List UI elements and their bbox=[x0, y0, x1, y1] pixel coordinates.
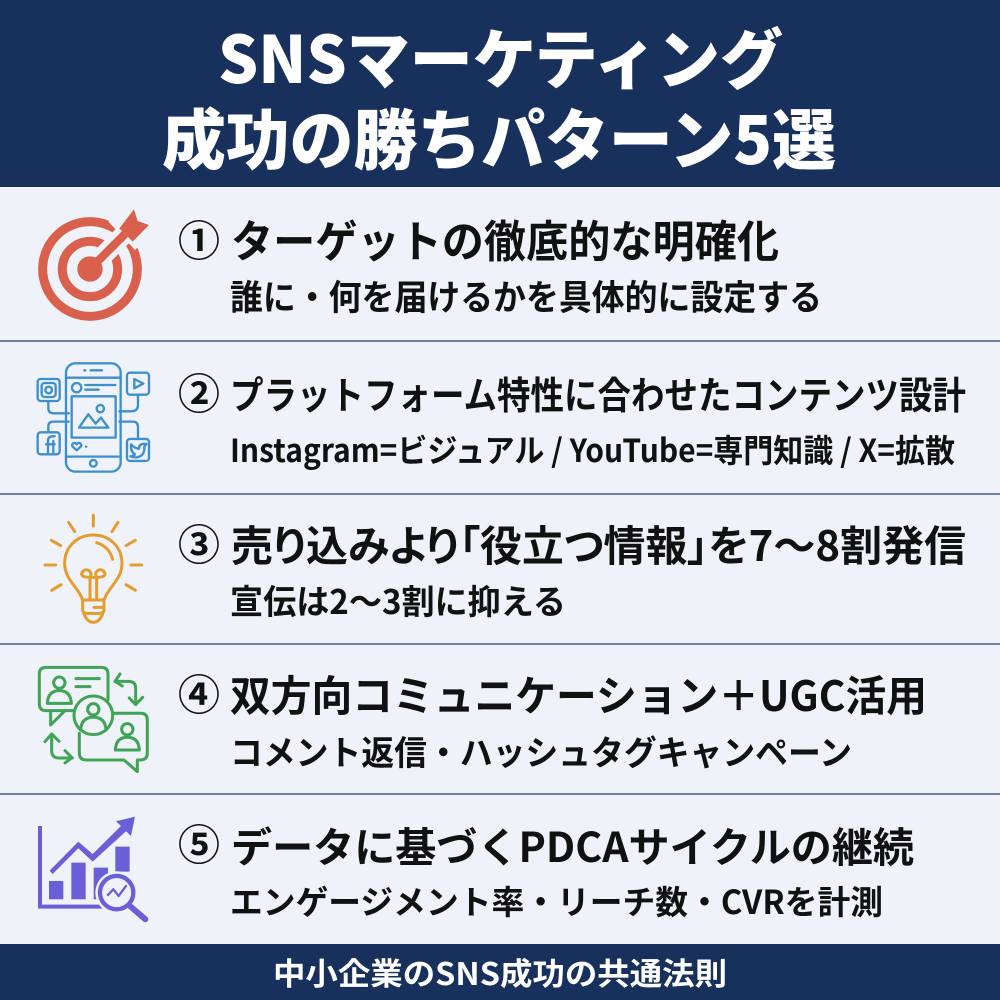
icon: light bulb bbox=[45, 515, 142, 622]
heading 4: 双方向コミュニケーション＋UGC活用 bbox=[230, 663, 927, 724]
panel: pattern 1 bbox=[43, 206, 822, 321]
description 5: エンゲージメント率・リーチ数・CVRを計測 bbox=[230, 876, 883, 924]
panel: pattern 3 bbox=[45, 512, 966, 624]
icon: conversation with arrows bbox=[39, 667, 147, 772]
description 1: 誰に・何を届けるかを具体的に設定する bbox=[230, 270, 822, 321]
panel: pattern 5 bbox=[40, 812, 914, 924]
heading 3: 売り込みより「役立つ情報」を7〜8割発信 bbox=[231, 513, 966, 574]
icon: target with arrow bbox=[43, 209, 149, 316]
header banner: 成功の勝ちパターン5選 bbox=[162, 88, 836, 184]
footer text: 中小企業のSNS成功の共通法則 bbox=[273, 949, 727, 994]
description 4: コメント返信・ハッシュタグキャンペーン bbox=[230, 726, 852, 775]
panel: pattern 2 bbox=[38, 361, 966, 472]
number 4: ④ bbox=[178, 662, 220, 723]
title line 1: SNSマーケティング bbox=[218, 8, 783, 102]
heading 1: ターゲットの徹底的な明確化 bbox=[231, 206, 779, 270]
number 3: ③ bbox=[178, 512, 220, 573]
number 5: ⑤ bbox=[178, 812, 220, 873]
description 2: Instagram=ビジュアル / YouTube=専門知識 / X=拡散 bbox=[230, 426, 955, 472]
icon: growth chart with magnifier bbox=[40, 817, 145, 919]
footer banner bbox=[0, 944, 1000, 1000]
description 3: 宣伝は2〜3割に抑える bbox=[230, 575, 566, 624]
panel: pattern 4 bbox=[39, 662, 927, 775]
number 2: ② bbox=[178, 361, 220, 422]
icon: smartphone with social media bbox=[38, 363, 149, 472]
number 1: ① bbox=[178, 208, 220, 269]
header banner bbox=[0, 0, 1000, 187]
heading 5: データに基づくPDCAサイクルの継続 bbox=[231, 814, 914, 874]
